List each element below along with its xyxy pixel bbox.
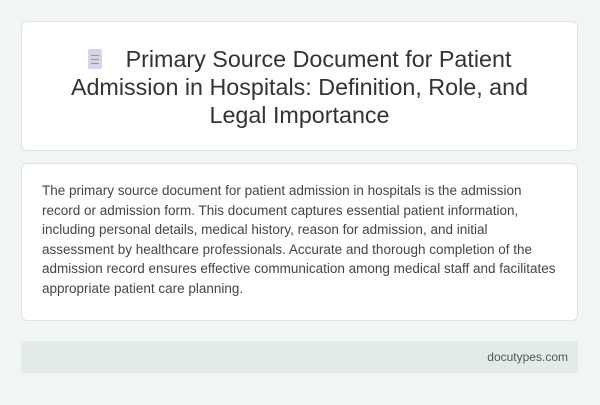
footer text: docutypes.com [487, 350, 568, 364]
icon: document [88, 49, 102, 69]
panel: description [21, 163, 578, 321]
title: Primary Source Document for Patient Admission in Hospitals: Definition, Role, and Legal Importance [71, 46, 528, 128]
text block: The primary source document for patient admission in hospitals is the admission record or admission form. This document captures essential patient information, including personal details, medical history, reason for admission, and initial assessment by healthcare professionals. Accurate and thorough completion of the admission record ensures effective communication among medical staff and facilitates appropriate patient care planning. [42, 183, 556, 296]
panel: title card [21, 21, 578, 151]
footer bar [21, 341, 578, 373]
